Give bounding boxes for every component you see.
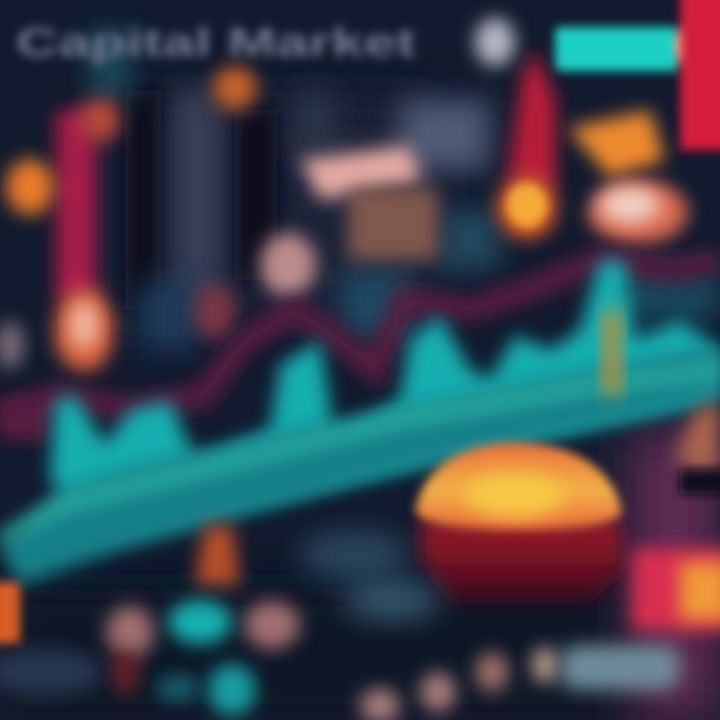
top small cream blob (475, 18, 515, 66)
central dark coins (300, 531, 440, 620)
orange and cream blobs (568, 110, 688, 244)
bottom centre gear shapes (106, 525, 300, 716)
central cream card and brown box (260, 145, 438, 297)
dome bowl (415, 442, 625, 605)
red candle and flame (497, 50, 557, 239)
bottom beads and slate pill (360, 645, 680, 720)
small orange marker on spike (603, 310, 621, 395)
teal area chart (0, 260, 720, 585)
right side small dark dish (675, 400, 720, 494)
bottom right pink block (632, 548, 720, 630)
left crimson candle (0, 66, 257, 372)
bottom left orange edge and dark disc (0, 582, 103, 696)
top right teal bar (555, 26, 709, 71)
title: Capital Market (16, 21, 416, 65)
maroon trend line (0, 260, 720, 415)
top right red column (680, 0, 720, 150)
